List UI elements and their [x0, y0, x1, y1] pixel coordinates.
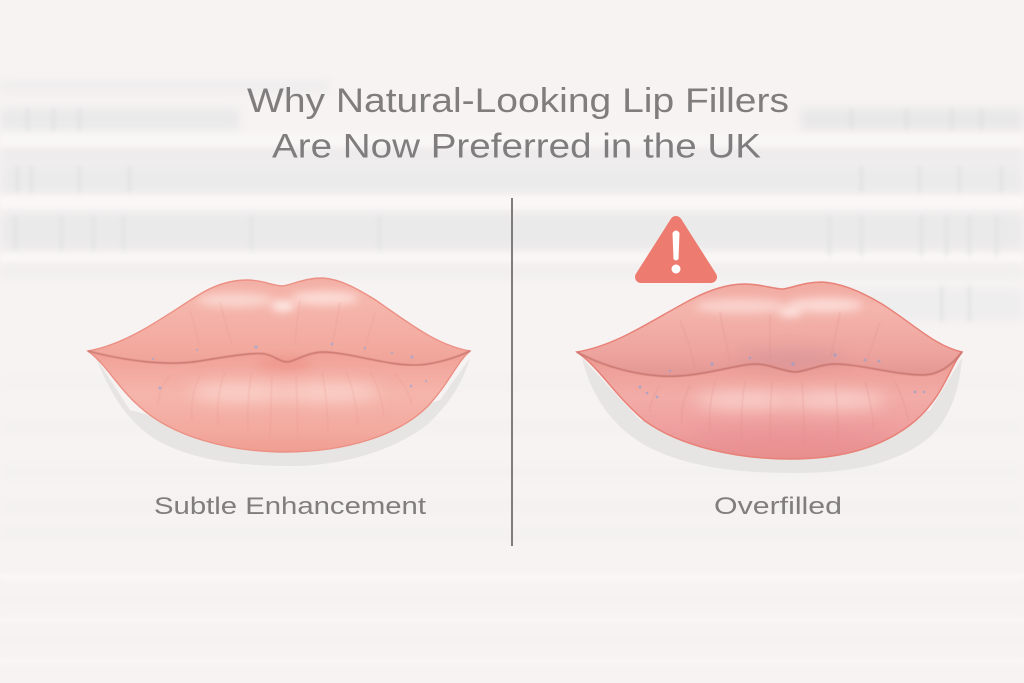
lips: overfilled — [575, 278, 965, 473]
lips: subtle enhancement — [85, 275, 475, 466]
panel: overfilled — [575, 222, 965, 520]
panel: subtle enhancement — [85, 275, 475, 520]
label: overfilled: Overfilled — [714, 493, 842, 520]
icon: warning triangle — [641, 222, 711, 277]
title: Why Natural-Looking Lip Fillers — [247, 82, 789, 120]
title — [247, 82, 789, 166]
title: Are Now Preferred in the UK — [272, 128, 761, 166]
divider — [511, 198, 513, 546]
label: subtle enhancement: Subtle Enhancement — [154, 493, 426, 520]
